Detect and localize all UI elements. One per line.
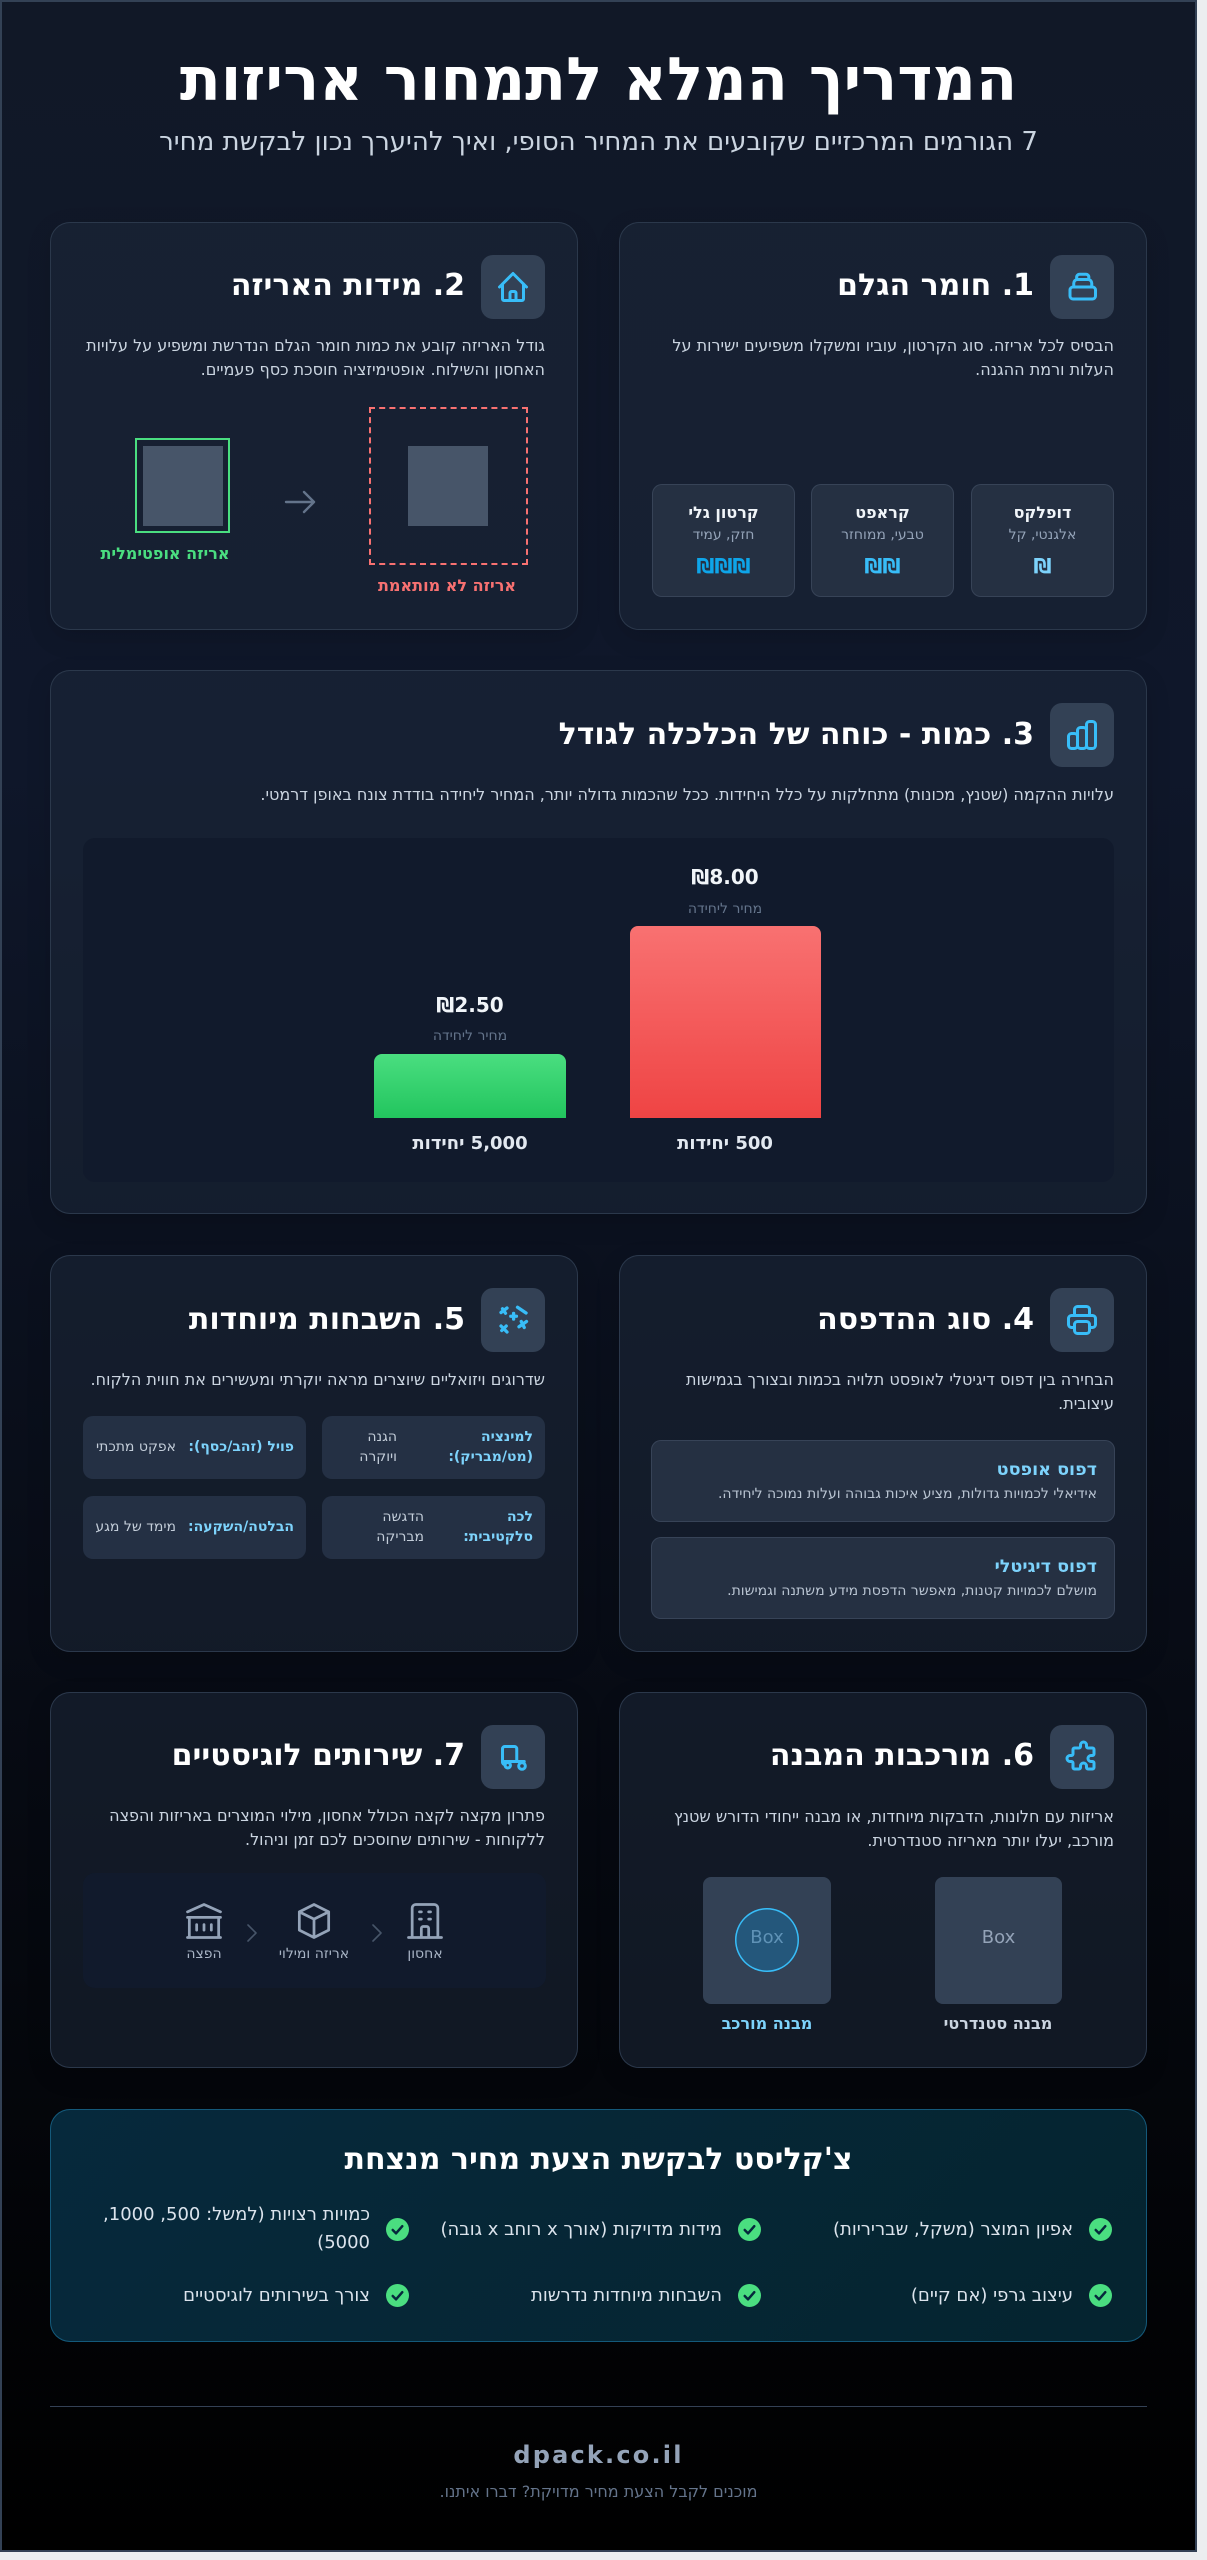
icon: material box (1050, 255, 1114, 319)
option: digital: מושלם לכמויות קטנות, מאפשר הדפסת מידע משתנה וגמישות. (727, 1583, 1097, 1599)
unit price caption: מחיר ליחידה (688, 901, 762, 917)
option: digital: דפוס דיגיטלי (995, 1557, 1097, 1577)
material: corrugated (652, 484, 795, 597)
arrow (284, 490, 316, 514)
finish: foil: אפקט מתכתי (96, 1439, 176, 1455)
option: offset: דפוס אופסט (997, 1460, 1097, 1480)
price: 5000 units: ₪2.50 (436, 993, 504, 1017)
description: dimensions (86, 336, 545, 379)
check icon (738, 2284, 761, 2307)
finish: varnish: לכה (507, 1509, 533, 1525)
description: print: עיצובית. (1058, 1394, 1114, 1413)
item text: צורך בשירותים לוגיסטיים (183, 2285, 370, 2306)
footer tagline: מוכנים לקבל הצעת מחיר מדויקת? דברו איתנו. (440, 2482, 757, 2501)
subtitle: 7 הגורמים המרכזיים שקובעים את המחיר הסופי, ואיך להיערך נכון לבקשת מחיר (159, 127, 1038, 157)
panel: 3 quantity (50, 670, 1147, 1214)
finish: varnish (322, 1496, 545, 1559)
item text: אפיון המוצר (משקל, שבריריות) (833, 2219, 1073, 2240)
arrow: chevron (372, 1924, 382, 1942)
complex box (703, 1877, 831, 2004)
title: המדריך המלא לתמחור אריזות (180, 45, 1017, 115)
finish: foil: פויל (זהב/כסף): (188, 1439, 294, 1455)
check icon (738, 2218, 761, 2241)
heading: finishes: 5. השבחות מיוחדות (189, 1302, 465, 1337)
diagram: oversized box (369, 407, 528, 565)
heading: quantity: 3. כמות - כוחה של הכלכלה לגודל (559, 717, 1034, 752)
finish: embossing (83, 1496, 306, 1559)
label: standard: מבנה סטנדרטי (944, 2014, 1052, 2033)
icon: puzzle (1050, 1725, 1114, 1789)
step: packing: אריזה ומילוי (279, 1946, 349, 1962)
description: material: העלות ורמת ההגנה. (975, 360, 1114, 379)
panel: 5 finishes (50, 1255, 578, 1652)
description: structure (674, 1807, 1114, 1850)
bar label: 500: 500 יחידות (677, 1133, 773, 1154)
unit price caption: מחיר ליחידה (433, 1028, 507, 1044)
description: logistics: ללקוחות - שירותים שחוסכים לכם זמן וניהול. (245, 1830, 545, 1849)
finish: lamination: למינציה (481, 1429, 533, 1445)
heading: logistics: 7. שירותים לוגיסטיים (172, 1738, 465, 1773)
finish: embossing: מימד של מגע (95, 1519, 176, 1535)
product inside optimal box (143, 446, 223, 526)
arrow: chevron (247, 1924, 257, 1942)
description: dimensions: האחסון והשילוח. אופטימיזציה חוסכת כסף פעמיים. (201, 360, 545, 379)
heading: structure: 6. מורכבות המבנה (770, 1738, 1034, 1773)
item text: השבחות מיוחדות נדרשות (531, 2285, 722, 2306)
finish: lamination: ויוקרה (359, 1449, 397, 1465)
icon: sparkles (481, 1288, 545, 1352)
description: finishes: שדרוגים ויזואליים שיוצרים מראה יוקרתי ומעשירים את חווית הלקוח. (91, 1370, 545, 1389)
step: storage (407, 1903, 443, 1962)
description: material: הבסיס לכל אריזה. סוג הקרטון, עוביו ומשקלו משפיעים ישירות על (672, 336, 1114, 355)
icon: printer (1050, 1288, 1114, 1352)
finish: varnish: מבריקה (376, 1529, 424, 1545)
panel: 4 print (619, 1255, 1147, 1652)
heading: material: 1. חומר הגלם (837, 268, 1034, 303)
option: offset: אידיאלי לכמויות גדולות, מציע איכות גבוהה ועלות נמוכה ליחידה. (718, 1486, 1097, 1502)
bar label: 5000: 5,000 יחידות (412, 1133, 528, 1154)
label: oversized box: אריזה לא מותאמת (378, 576, 516, 595)
chart panel (83, 838, 1114, 1182)
product inside oversized box (408, 446, 488, 526)
item text: מידות מדויקות (אורך x רוחב x גובה) (441, 2219, 722, 2240)
item text: עיצוב גרפי (אם קיים) (911, 2285, 1073, 2306)
panel: 6 structure (619, 1692, 1147, 2068)
material: duplex (971, 484, 1114, 597)
check icon (386, 2218, 409, 2241)
label: complex: מבנה מורכב (722, 2014, 812, 2033)
material: corrugated: ₪₪₪ (696, 554, 751, 578)
finish: varnish: הדגשה (382, 1509, 424, 1525)
description: print: הבחירה בין דפוס דיגיטלי לאופסט תלויה בכמות ובצורך בגמישות (686, 1370, 1114, 1389)
icon: bar chart (1050, 703, 1114, 767)
description: material (672, 336, 1114, 379)
footer brand: dpack.co.il (513, 2441, 684, 2469)
finish: lamination: (מט/מבריק): (448, 1449, 533, 1465)
description: quantity: עלויות ההקמה (שטנץ, מכונות) מתחלקות על כלל היחידות. ככל שהכמות גדולה יותר, המחיר ליחידה בודדת צונח באופן דרמטי. (260, 785, 1114, 804)
diagram: optimal box (135, 438, 230, 533)
description: structure: אריזות עם חלונות, הדבקות מיוחדות, או מבנה ייחודי הדורש שטנץ (674, 1807, 1114, 1826)
bar: 500 units (630, 926, 821, 1118)
option: digital (651, 1537, 1115, 1619)
standard box (935, 1877, 1062, 2004)
material: kraft (811, 484, 954, 597)
panel: 1 material (619, 222, 1147, 630)
item text: כמויות רצויות (למשל: 500, 1000, (103, 2204, 370, 2225)
complex box: Box (750, 1927, 784, 1948)
step: packing (279, 1903, 349, 1962)
option: offset (651, 1440, 1115, 1522)
item text: 5000) (317, 2232, 370, 2253)
heading: dimensions: 2. מידות האריזה (231, 268, 465, 303)
description: structure: מורכב, יעלו יותר מאריזה סטנדרטית. (867, 1831, 1114, 1850)
material: duplex: ₪ (1033, 554, 1052, 578)
material: duplex: אלגנטי, קל (1009, 527, 1076, 543)
step: storage: אחסון (407, 1946, 443, 1962)
item text (103, 2204, 370, 2253)
standard box: Box (982, 1927, 1015, 1948)
finish: lamination (322, 1416, 545, 1479)
step: distribution: הפצה (186, 1946, 222, 1962)
description: logistics: פתרון מקצה לקצה הכולל אחסון, מילוי המוצרים באריזות והפצה (109, 1806, 545, 1825)
material: corrugated: חזק, עמיד (693, 527, 754, 543)
description: dimensions: גודל האריזה קובע את כמות חומר הגלם הנדרשת ומשפיע על עלויות (86, 336, 545, 355)
bar: 5000 units (374, 1054, 566, 1118)
heading: checklist: צ'קליסט לבקשת הצעת מחיר מנצחת (344, 2142, 853, 2177)
description: print (686, 1370, 1114, 1413)
finish: embossing: הבלטה/השקעה: (188, 1519, 294, 1535)
finish: lamination: הגנה (367, 1429, 397, 1445)
material: kraft: טבעי, ממוחזר (841, 527, 924, 543)
finish: varnish: סלקטיבית: (463, 1529, 533, 1545)
icon: truck (481, 1725, 545, 1789)
material: duplex: דופלקס (1014, 503, 1071, 522)
panel: checklist (50, 2109, 1147, 2342)
material: corrugated: קרטון גלי (688, 503, 759, 522)
step: distribution (186, 1903, 222, 1962)
check icon (1089, 2284, 1112, 2307)
description: logistics (109, 1806, 545, 1849)
panel: 7 logistics (50, 1692, 578, 2068)
panel: 2 dimensions (50, 222, 578, 630)
check icon (386, 2284, 409, 2307)
checklist items (103, 2204, 1112, 2307)
label: optimal box: אריזה אופטימלית (100, 544, 230, 563)
logistics flow panel (83, 1873, 546, 1988)
check icon (1089, 2218, 1112, 2241)
heading: print: 4. סוג ההדפסה (817, 1302, 1034, 1337)
material: kraft: ₪₪ (864, 554, 901, 578)
icon: home (481, 255, 545, 319)
material: kraft: קראפט (855, 503, 910, 522)
price: 500 units: ₪8.00 (691, 865, 759, 889)
finish: foil (83, 1416, 306, 1479)
